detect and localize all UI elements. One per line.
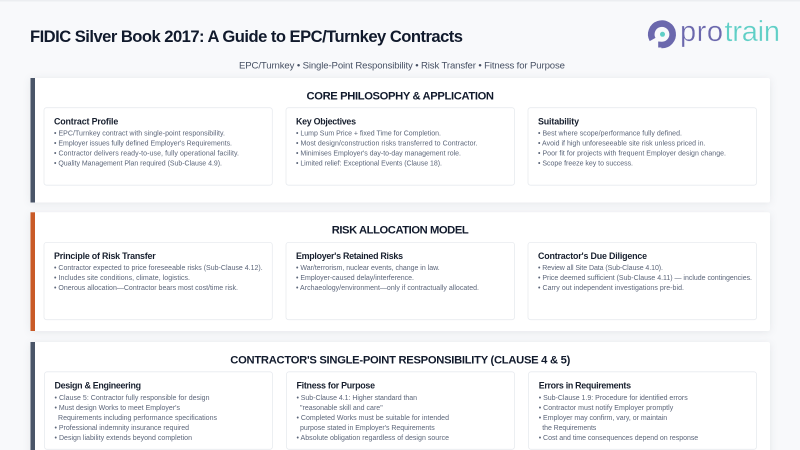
- card: suitability: [528, 108, 756, 185]
- card: fitness for purpose: • Sub-Clause 4.1: Higher standard than: [296, 395, 417, 402]
- heading: core philosophy: CORE PHILOSOPHY & APPLICATION: [306, 90, 494, 102]
- card: principle of risk transfer: [44, 242, 272, 320]
- title: FIDIC Silver Book 2017: A Guide to EPC/Turnkey Contracts: [30, 27, 463, 46]
- card: errors in requirements: • Employer may confirm, vary, or maintain: [539, 415, 667, 422]
- card: errors in requirements: • Sub-Clause 1.9: Procedure for identified errors: [539, 395, 688, 402]
- card: contractor's due diligence: • Carry out independent investigations pre-bid.: [538, 285, 684, 292]
- card: errors in requirements: the Requirements: [542, 425, 597, 432]
- heading: risk allocation: RISK ALLOCATION MODEL: [332, 224, 469, 236]
- card: errors in requirements: Errors in Requirements: [539, 380, 631, 390]
- card: fitness for purpose: purpose stated in Employer's Requirements: [300, 425, 435, 432]
- card: principle of risk transfer: Principle of Risk Transfer: [54, 251, 156, 261]
- card: employer's retained risks: • War/terrorism, nuclear events, change in law.: [296, 265, 440, 272]
- card: contractor's due diligence: • Price deemed sufficient (Sub-Clause 4.11) — include contingencies.: [538, 275, 752, 282]
- card: contract profile: Contract Profile: [54, 116, 118, 126]
- card: errors in requirements: • Cost and time consequences depend on response: [539, 435, 698, 442]
- card: suitability: Suitability: [538, 116, 579, 126]
- card: design & engineering: • Professional indemnity insurance required: [54, 425, 189, 432]
- card: suitability: • Avoid if high unforeseeable site risk unless priced in.: [538, 140, 706, 148]
- card: contractor's due diligence: Contractor's Due Diligence: [538, 251, 647, 261]
- card: design & engineering: • Design liability extends beyond completion: [54, 435, 192, 442]
- card: design & engineering: Design & Engineering: [54, 380, 141, 390]
- icon: logo ring: [651, 24, 673, 48]
- card: fitness for purpose: [286, 372, 514, 449]
- logo wordmark: pro: pro: [680, 16, 723, 48]
- panel: risk allocation model: [30, 212, 770, 331]
- card: fitness for purpose: Fitness for Purpose: [296, 380, 375, 390]
- card: employer's retained risks: [286, 242, 514, 320]
- card: employer's retained risks: Employer's Retained Risks: [296, 251, 403, 261]
- card: contractor's due diligence: • Review all Site Data (Sub-Clause 4.10).: [538, 265, 663, 272]
- card: contractor's due diligence: [528, 242, 756, 320]
- card: fitness for purpose: • Completed Works must be suitable for intended: [296, 415, 449, 422]
- panel: core philosophy & application: [30, 78, 770, 202]
- card: contract profile: [44, 108, 272, 185]
- card: suitability: • Best where scope/performance fully defined.: [538, 130, 682, 138]
- card: principle of risk transfer: • Onerous allocation—Contractor bears most cost/time risk.: [54, 285, 238, 292]
- card: design & engineering: [44, 372, 272, 449]
- card: errors in requirements: [528, 372, 756, 449]
- logo wordmark: train: train: [724, 16, 780, 48]
- card: principle of risk transfer: • Contractor expected to price foreseeable risks (Sub-Clause 4.12).: [54, 265, 263, 272]
- card: suitability: • Poor fit for projects with frequent Employer design change.: [538, 150, 726, 158]
- card: key objectives: • Minimises Employer's day-to-day management role.: [296, 150, 461, 158]
- card: contract profile: • Employer issues fully defined Employer's Requirements.: [54, 140, 232, 148]
- card: design & engineering: • Clause 5: Contractor fully responsible for design: [54, 395, 210, 402]
- card: employer's retained risks: • Employer-caused delay/interference.: [296, 275, 414, 282]
- card: design & engineering: • Must design Works to meet Employer's: [54, 405, 180, 412]
- card: key objectives: • Limited relief: Exceptional Events (Clause 18).: [296, 160, 442, 168]
- card: contract profile: • Quality Management Plan required (Sub-Clause 4.9).: [54, 160, 222, 168]
- card: key objectives: [286, 108, 514, 185]
- card: employer's retained risks: • Archaeology/environment—only if contractually allocated.: [296, 285, 479, 292]
- card: contract profile: • EPC/Turnkey contract with single-point responsibility.: [54, 130, 225, 138]
- card: key objectives: • Most design/construction risks transferred to Contractor.: [296, 140, 478, 148]
- card: design & engineering: Requirements including performance specifications: [58, 415, 218, 422]
- heading: single-point responsibility: CONTRACTOR'S SINGLE-POINT RESPONSIBILITY (CLAUSE 4 & 5): [230, 354, 571, 366]
- panel: contractor's single-point responsibility: [30, 342, 770, 450]
- card: key objectives: Key Objectives: [296, 116, 356, 126]
- card: suitability: • Scope freeze key to success.: [538, 160, 633, 168]
- card: fitness for purpose: • Absolute obligation regardless of design source: [296, 435, 449, 442]
- card: principle of risk transfer: • Includes site conditions, climate, logistics.: [54, 275, 190, 282]
- card: errors in requirements: • Contractor must notify Employer promptly: [539, 405, 674, 412]
- card: key objectives: • Lump Sum Price + fixed Time for Completion.: [296, 130, 441, 138]
- subtitle: EPC/Turnkey • Single-Point Responsibility • Risk Transfer • Fitness for Purpose: [239, 60, 565, 72]
- card: contract profile: • Contractor delivers ready-to-use, fully operational facility.: [54, 150, 239, 158]
- card: fitness for purpose: "reasonable skill and care": [300, 405, 383, 412]
- logo: protrain: [651, 16, 780, 48]
